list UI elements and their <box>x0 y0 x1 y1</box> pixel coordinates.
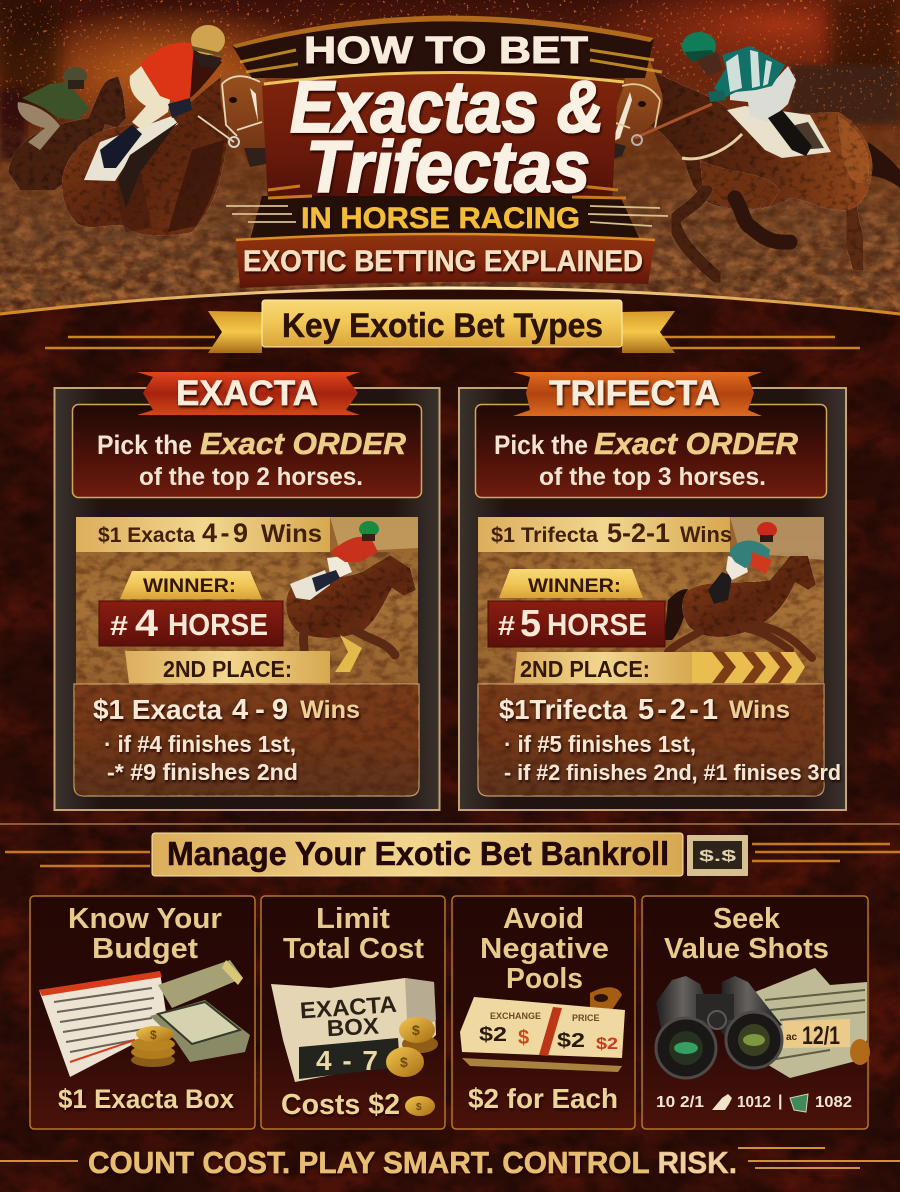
horse number plate: 4 <box>135 603 158 645</box>
icon: money plaque: $.$ <box>699 848 736 865</box>
result explanation: · if #5 finishes 1st, <box>504 731 696 757</box>
result explanation: Wins <box>729 696 790 724</box>
photo scene: trifecta <box>478 517 841 796</box>
section ribbon: key exotic bet types: Key Exotic Bet Types <box>282 307 603 345</box>
winner tag <box>120 571 262 599</box>
saddle cloth <box>727 106 831 158</box>
second place tag: 2ND PLACE: <box>163 656 292 682</box>
winner tag <box>499 569 643 598</box>
icon: exacta box newspaper and coins: $ <box>412 1022 420 1038</box>
horse head <box>616 60 663 150</box>
result explanation: - if #2 finishes 2nd, #1 finises 3rd <box>504 760 841 785</box>
tail <box>868 142 900 188</box>
horse <box>286 521 416 672</box>
gold arch <box>0 288 900 314</box>
white breeches <box>730 66 796 122</box>
card: avoid negative pools: Negative <box>480 933 609 965</box>
bar title <box>76 517 330 552</box>
result explanation <box>478 684 841 796</box>
jockey: green silks <box>18 67 90 150</box>
top dark banner <box>232 16 654 78</box>
card: seek value shots: Seek <box>713 903 781 935</box>
definition box: Pick the <box>494 430 588 460</box>
gold helmet <box>191 25 225 55</box>
horse number plate: # <box>498 610 515 641</box>
result explanation: 4-9 <box>232 694 288 726</box>
icon: exacta box newspaper and coins: $ <box>400 1054 408 1070</box>
title line 4: IN HORSE RACING <box>301 202 580 235</box>
icon: betting slip, cash and coins <box>39 960 250 1077</box>
definition box: Exact ORDER <box>200 426 407 461</box>
title line 3: Trifectas <box>306 127 590 208</box>
horse <box>664 522 816 658</box>
boot <box>768 110 812 156</box>
card: seek value shots <box>642 896 870 1129</box>
ribbon: exacta <box>137 372 360 415</box>
red lower panel <box>236 234 655 288</box>
title banner <box>226 16 668 288</box>
card: know your budget: Know Your <box>68 903 222 935</box>
card: avoid negative pools: $2 for Each <box>468 1083 618 1114</box>
bar title <box>478 517 732 552</box>
icon: exacta box newspaper and coins: 4 - 7 <box>316 1045 378 1076</box>
ribbon: trifecta: TRIFECTA <box>549 374 720 413</box>
icon: betting slip, cash and coins: $ <box>150 1028 157 1042</box>
section ribbon: key exotic bet types <box>45 300 860 353</box>
icon: exacta box newspaper and coins: EXACTA <box>299 991 398 1023</box>
chest <box>190 50 222 98</box>
panel: exacta <box>54 372 440 810</box>
ribbon: exacta: EXACTA <box>176 374 318 413</box>
section heading: manage bankroll <box>0 824 900 876</box>
definition box <box>72 404 422 498</box>
icon: small coin: $ <box>416 1102 422 1113</box>
second place tag with chevrons: 2ND PLACE: <box>520 656 650 682</box>
icon: exacta box newspaper and coins <box>271 978 438 1082</box>
green helmet <box>682 32 716 56</box>
section heading: manage bankroll: Manage Your Exotic Bet Bankroll <box>167 835 669 872</box>
white breeches <box>130 60 170 130</box>
definition box <box>476 404 826 498</box>
card: avoid negative pools: Pools <box>506 963 583 995</box>
card: know your budget: $1 Exacta Box <box>58 1084 234 1114</box>
ribbon: trifecta <box>513 372 762 416</box>
result explanation: 5-2-1 <box>638 694 718 726</box>
horse body <box>640 70 872 210</box>
result explanation: · if #4 finishes 1st, <box>104 731 296 757</box>
bar title: $1 Trifecta <box>491 524 598 547</box>
icon: small coin <box>405 1096 435 1116</box>
icon: betting tickets: $ <box>518 1027 529 1049</box>
dark mid banner <box>250 196 640 240</box>
icon: betting tickets: $2 <box>479 1024 507 1046</box>
glove <box>168 98 192 118</box>
horse body <box>62 70 234 236</box>
icon: binoculars <box>656 976 782 1078</box>
bar title: 4-9 <box>202 518 248 548</box>
second place tag <box>125 651 330 683</box>
large left horse and jockey <box>62 25 270 236</box>
card: limit total cost: Total Cost <box>283 933 424 965</box>
card: avoid negative pools <box>452 896 635 1129</box>
horse number plate <box>99 601 283 646</box>
subtitle: EXOTIC BETTING EXPLAINED <box>243 245 643 278</box>
boot <box>100 125 142 168</box>
icon: betting tickets: $2 <box>557 1030 585 1052</box>
footer tagline: COUNT COST. PLAY SMART. CONTROL RISK. <box>88 1145 737 1180</box>
winner tag: WINNER: <box>528 576 621 597</box>
panel: trifecta <box>459 372 846 810</box>
bar title: Wins <box>261 520 322 548</box>
horse number plate: # <box>110 610 128 641</box>
icon: exacta box newspaper and coins: BOX <box>326 1012 380 1041</box>
horse number plate: HORSE <box>547 607 647 642</box>
bar title: $1 Exacta <box>98 524 195 547</box>
card: limit total cost <box>261 896 445 1129</box>
horse number plate: 5 <box>520 603 541 645</box>
saddle cloth <box>84 116 178 181</box>
card: know your budget <box>30 896 255 1129</box>
icon: cash under ticket: ac <box>786 1032 798 1043</box>
photo scene: exacta <box>74 517 419 796</box>
horse number plate: HORSE <box>168 607 268 642</box>
odds line: | <box>778 1093 782 1110</box>
result explanation <box>74 684 419 796</box>
odds line: 1012 <box>737 1094 771 1111</box>
card: avoid negative pools: Avoid <box>503 903 584 935</box>
icon: money plaque <box>687 835 748 876</box>
bar title: 5-2-1 <box>607 518 670 548</box>
bar title: Wins <box>680 522 732 547</box>
result explanation: -* #9 finishes 2nd <box>107 759 298 785</box>
dirt track and glow <box>0 0 900 315</box>
second place tag with chevrons <box>514 652 805 683</box>
header scene clipped by the arch <box>0 0 900 315</box>
odds line: 10 2/1 <box>656 1094 704 1111</box>
icon: betting tickets: PRICE <box>572 1013 600 1023</box>
odds line <box>656 1093 852 1112</box>
large right horse and jockey <box>603 32 900 278</box>
teal striped silks <box>714 46 785 98</box>
odds line: 1082 <box>815 1094 852 1111</box>
definition box: Pick the <box>97 430 192 460</box>
hind leg <box>847 190 862 266</box>
icon: cash under ticket: 12/1 <box>802 1022 840 1050</box>
red centre panel <box>262 71 618 204</box>
front legs <box>674 190 718 278</box>
title line 1: HOW TO BET <box>304 30 588 72</box>
red silk shirt <box>140 43 194 102</box>
card: know your budget: Budget <box>92 933 198 965</box>
result explanation: $1Trifecta <box>499 694 627 725</box>
title line 2: Exactas & <box>290 67 604 148</box>
icon: cash under ticket <box>755 968 870 1078</box>
card: seek value shots: Value Shots <box>664 933 829 965</box>
icon: betting tickets: EXCHANGE <box>490 1011 541 1021</box>
horse head <box>220 70 266 161</box>
card: limit total cost: Costs $2 <box>281 1089 400 1121</box>
card: limit total cost: Limit <box>316 903 390 935</box>
small left horse and jockey <box>8 67 126 190</box>
result explanation: Wins <box>300 696 360 724</box>
icon: betting tickets: $2 <box>596 1034 618 1053</box>
result explanation: $1 Exacta <box>93 694 222 725</box>
horse number plate <box>488 601 665 647</box>
definition box: Exact ORDER <box>594 426 799 461</box>
winner tag: WINNER: <box>143 576 236 597</box>
icon: betting tickets <box>460 987 625 1072</box>
definition box: of the top 2 horses. <box>139 463 363 491</box>
definition box: of the top 3 horses. <box>539 463 766 491</box>
